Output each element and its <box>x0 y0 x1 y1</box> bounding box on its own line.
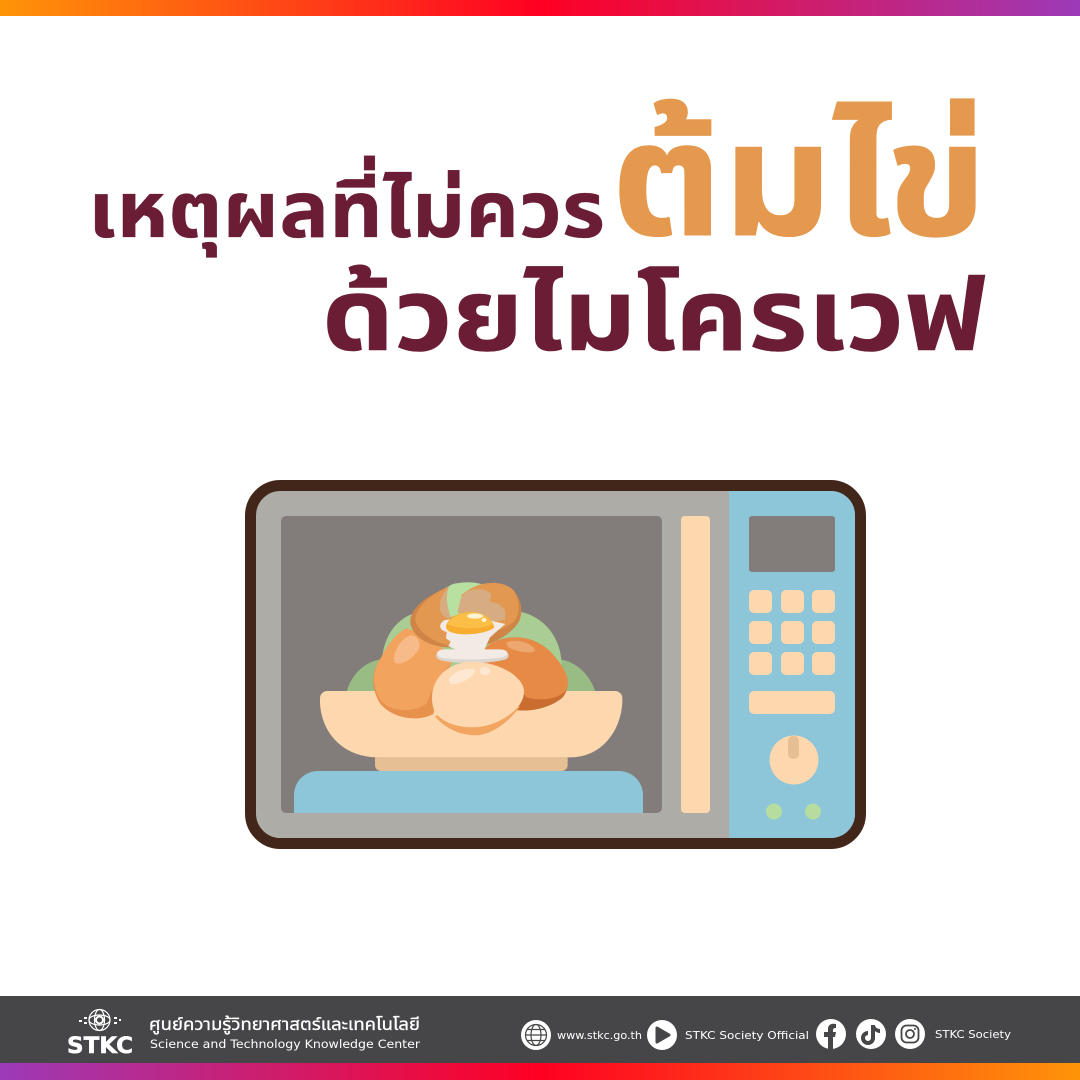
front egg <box>432 662 524 735</box>
top gradient bar <box>0 0 1080 16</box>
bowl with eggs <box>320 582 622 771</box>
turntable <box>294 771 643 813</box>
logo wordmark: STKC <box>67 1034 133 1059</box>
icon: instagram <box>895 1019 925 1049</box>
bowl <box>320 691 622 757</box>
bottom gradient bar <box>0 1063 1080 1080</box>
yolk <box>446 612 494 634</box>
microwave body <box>250 486 860 844</box>
footer band <box>0 996 1080 1063</box>
icon: play <box>647 1020 677 1050</box>
door handle <box>681 516 710 813</box>
icon: globe <box>521 1020 551 1050</box>
cracked top egg <box>410 583 521 647</box>
logo emblem <box>79 1010 121 1030</box>
right egg <box>467 637 568 711</box>
microwave illustration <box>250 486 860 844</box>
indicator lights <box>766 804 821 820</box>
centre name English: Science and Technology Knowledge Center <box>150 1037 420 1051</box>
keypad <box>749 590 835 675</box>
youtube name: STKC Society Official <box>685 1029 809 1042</box>
start button <box>749 691 835 714</box>
title line 2: ด้วยไมโครเวฟ <box>322 260 986 372</box>
instagram name: STKC Society <box>935 1028 1012 1041</box>
centre name Thai: ศูนย์ความรู้วิทยาศาสตร์และเทคโนโลยี <box>149 1014 420 1036</box>
dial <box>770 736 818 784</box>
egg foot and bowl back <box>375 757 568 771</box>
lettuce <box>347 582 595 692</box>
icon: tiktok <box>856 1019 886 1049</box>
title highlight: ต้มไข่ <box>611 90 987 269</box>
inner shell <box>457 589 505 623</box>
title <box>88 90 987 372</box>
STKC logo <box>67 1010 133 1059</box>
control panel <box>729 491 855 838</box>
website: www.stkc.go.th <box>557 1029 642 1042</box>
title line 1: เหตุผลที่ไม่ควร <box>88 156 605 257</box>
left egg <box>373 628 452 718</box>
icon: facebook <box>816 1019 846 1049</box>
microwave window <box>281 516 662 813</box>
egg white <box>436 617 509 663</box>
display <box>749 516 835 572</box>
